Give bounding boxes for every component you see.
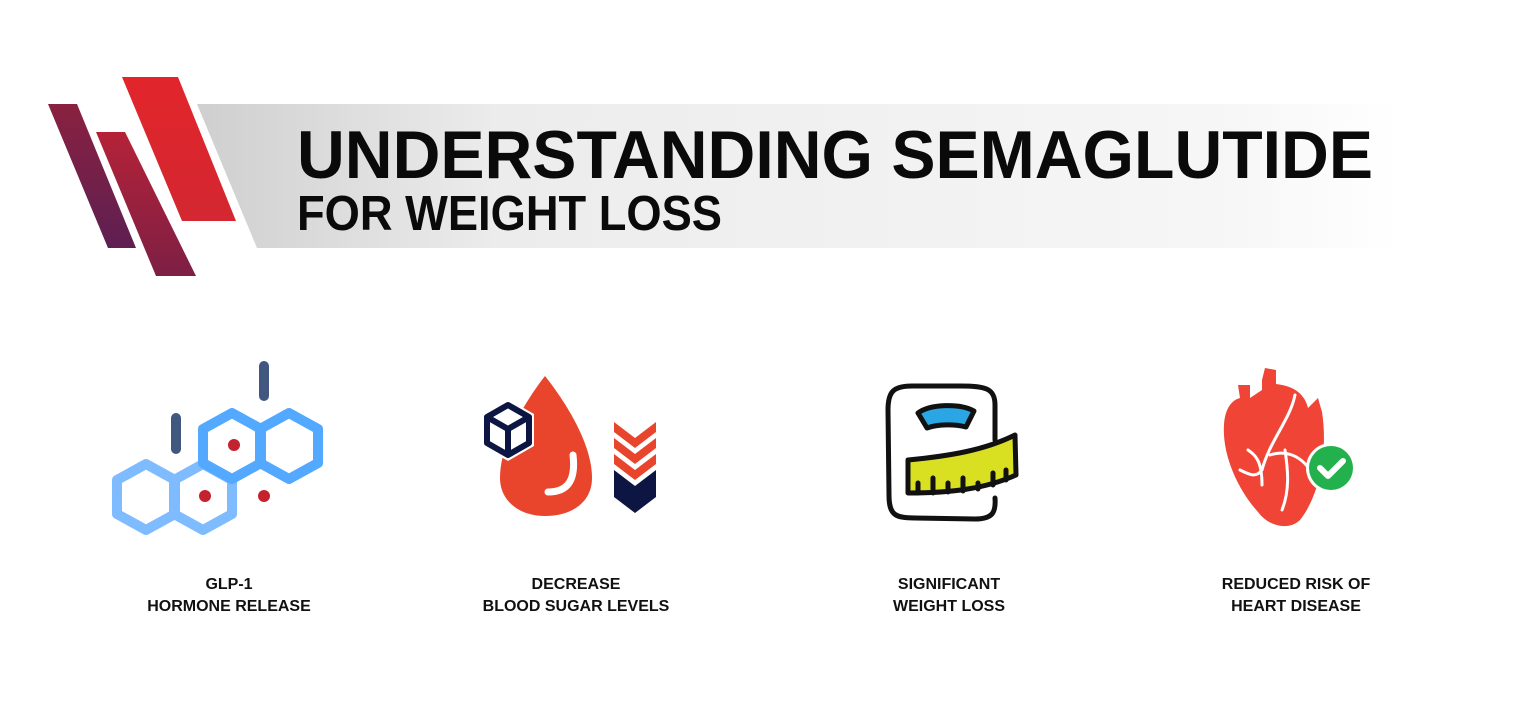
icon: blood drop with sugar cube and arrows <box>482 376 656 516</box>
label: blood sugar: BLOOD SUGAR LEVELS <box>483 598 670 615</box>
title: UNDERSTANDING SEMAGLUTIDE <box>297 117 1373 193</box>
icon: scale with tape <box>888 386 1016 519</box>
label: heart: HEART DISEASE <box>1231 598 1361 615</box>
label: GLP-1 <box>147 576 311 615</box>
label: heart <box>1222 576 1370 615</box>
subtitle: FOR WEIGHT LOSS <box>297 187 722 241</box>
label: weight loss <box>893 576 1005 615</box>
grey band <box>197 104 1400 248</box>
label: GLP-1: GLP-1 <box>205 576 253 593</box>
label: blood sugar <box>483 576 670 615</box>
icon: heart with check <box>1224 368 1356 526</box>
label: blood sugar: DECREASE <box>532 576 621 593</box>
icon: molecule <box>117 366 318 530</box>
label: heart: REDUCED RISK OF <box>1222 576 1370 593</box>
label: weight loss: WEIGHT LOSS <box>893 598 1005 615</box>
logo stripes <box>48 77 236 276</box>
label: GLP-1: HORMONE RELEASE <box>147 598 311 615</box>
header banner <box>48 77 1400 276</box>
label: weight loss: SIGNIFICANT <box>898 576 1000 593</box>
